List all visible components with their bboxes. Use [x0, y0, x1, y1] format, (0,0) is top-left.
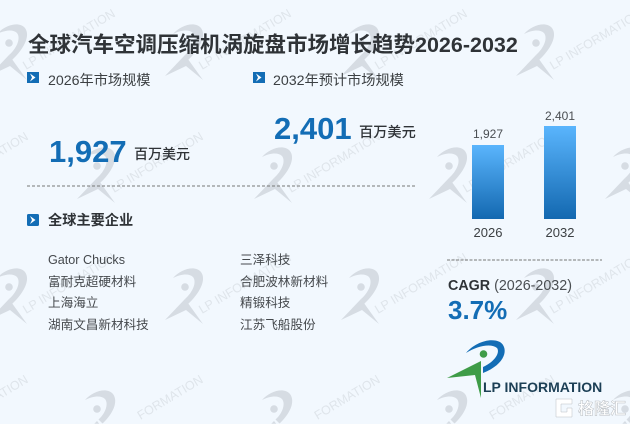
bar labels: 2,401	[545, 109, 575, 123]
2032 heading: 2032年预计市场规模	[273, 72, 404, 89]
company list: 合肥波林新材料	[240, 274, 329, 289]
watermark pattern: FORMATION	[487, 372, 558, 423]
company list	[48, 253, 329, 332]
panel: key companies	[27, 212, 329, 332]
watermark pattern: LP INFORMATION	[372, 250, 470, 317]
company list: 三泽科技	[240, 253, 291, 267]
LP Information logo	[447, 340, 602, 398]
icon: 2032 bullet	[253, 72, 265, 83]
axis labels	[474, 225, 574, 240]
2026 value: 1,927	[49, 134, 127, 169]
LP Information logo: LP INFORMATION	[483, 379, 602, 395]
company list: 湖南文昌新材科技	[48, 317, 149, 332]
watermark pattern: LP INFORMATION	[372, 6, 470, 73]
companies heading: 全球主要企业	[48, 212, 133, 229]
watermark pattern: LP INFORMATION	[108, 129, 206, 196]
title: 全球汽车空调压缩机涡旋盘市场增长趋势2026-2032	[28, 32, 518, 57]
CAGR callout: CAGR (2026-2032)	[448, 278, 572, 294]
watermark pattern: FORMATION	[135, 372, 206, 423]
company list: Gator Chucks	[48, 253, 125, 267]
bar 2026	[472, 145, 504, 219]
icon: companies bullet	[27, 214, 39, 226]
axis labels: 2026	[474, 225, 502, 240]
watermark pattern: LP INFORMATION	[196, 250, 294, 317]
watermark pattern: LP INFORMATION	[460, 129, 558, 196]
2026 heading: 2026年市场规模	[48, 72, 150, 89]
2026 unit: 百万美元	[134, 146, 190, 162]
company list: 富耐克超硬材料	[48, 274, 137, 289]
watermark pattern: LP INFORMATION	[20, 250, 118, 317]
CAGR callout	[448, 278, 572, 325]
watermark pattern: LP INFORMATION	[285, 129, 383, 196]
2032 unit: 百万美元	[359, 124, 416, 141]
watermark: Gelonghui: 格隆汇	[578, 399, 626, 418]
panel: 2032 market size	[253, 72, 416, 146]
company list: 精锻科技	[240, 296, 291, 310]
watermark pattern: LP INFORMATION	[20, 6, 118, 73]
bar 2032	[544, 126, 576, 219]
watermark pattern: LP INFORMATION	[196, 6, 294, 73]
CAGR callout: 3.7%	[448, 295, 507, 325]
watermark pattern: FORMATION	[312, 372, 383, 423]
bar labels: 1,927	[473, 127, 503, 141]
watermark: Gelonghui	[556, 399, 626, 418]
icon: 2026 bullet	[27, 72, 39, 83]
bar chart	[472, 109, 576, 240]
bar labels	[473, 109, 575, 141]
company list: 上海海立	[48, 296, 98, 310]
2032 value: 2,401	[274, 111, 352, 146]
panel: 2026 market size	[27, 72, 190, 169]
company list: 江苏飞船股份	[240, 317, 316, 332]
axis labels: 2032	[546, 225, 574, 240]
